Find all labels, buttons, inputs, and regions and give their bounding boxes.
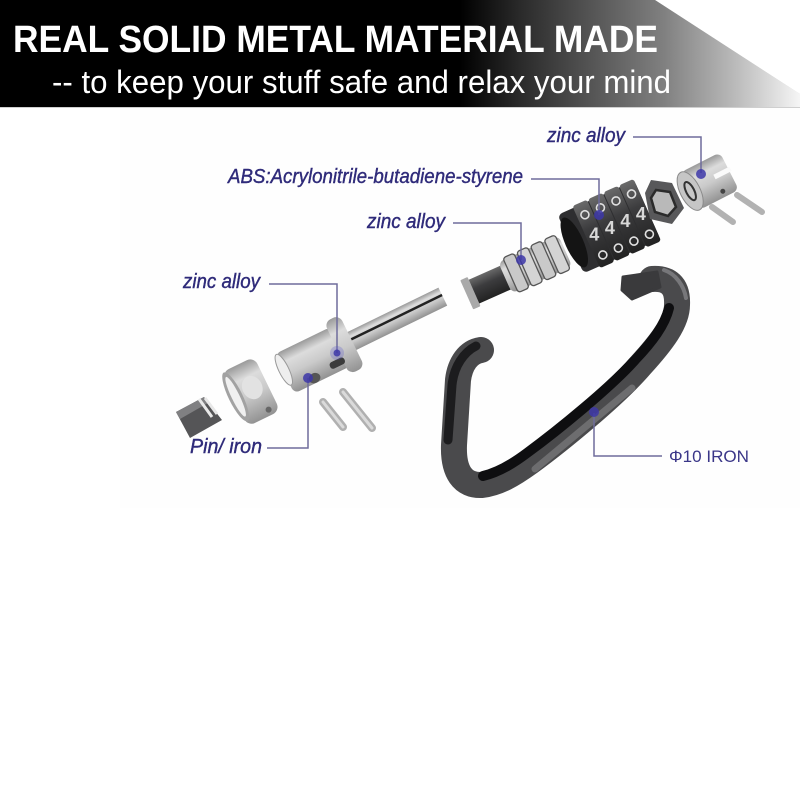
- latch block: [176, 397, 222, 438]
- callout: zinc alloy, end cap: zinc alloy: [546, 125, 626, 147]
- callout: phi 10 iron: Φ10 IRON: [669, 447, 749, 466]
- callout: zinc alloy, end cap: [546, 125, 706, 179]
- photo backdrop: [120, 108, 800, 508]
- combination dials: 4: [620, 211, 630, 231]
- end cap: [672, 151, 741, 214]
- callout: zinc alloy, spindle: [366, 211, 526, 265]
- callout: zinc alloy, body: [182, 271, 344, 360]
- inner dial spindle: [459, 234, 573, 312]
- zinc alloy lock body with shaft: [268, 271, 456, 402]
- cap pins: [712, 195, 762, 222]
- header banner: [0, 0, 800, 108]
- combination dials: [552, 178, 662, 277]
- callout: zinc alloy, body: zinc alloy: [182, 271, 261, 293]
- hex nut: [645, 180, 684, 224]
- callout: zinc alloy, spindle: zinc alloy: [366, 211, 446, 233]
- callout: ABS dials: [227, 166, 604, 220]
- callout: pin iron: [190, 373, 313, 458]
- callout: pin iron: Pin/ iron: [190, 436, 262, 458]
- combination dials: 4: [589, 225, 599, 245]
- combination dials: 4: [636, 204, 646, 224]
- locking ring: [217, 357, 280, 429]
- callout: phi 10 iron: [589, 407, 749, 466]
- callout: ABS dials: ABS:Acrylonitrile-butadiene-styrene: [227, 166, 523, 188]
- combination dials: 4: [605, 218, 615, 238]
- body pins: [323, 392, 372, 428]
- shackle flat end: [622, 272, 660, 299]
- subtitle: -- to keep your stuff safe and relax your mind: [52, 64, 671, 100]
- shackle: iron: [448, 270, 686, 485]
- title: REAL SOLID METAL MATERIAL MADE: [13, 19, 658, 61]
